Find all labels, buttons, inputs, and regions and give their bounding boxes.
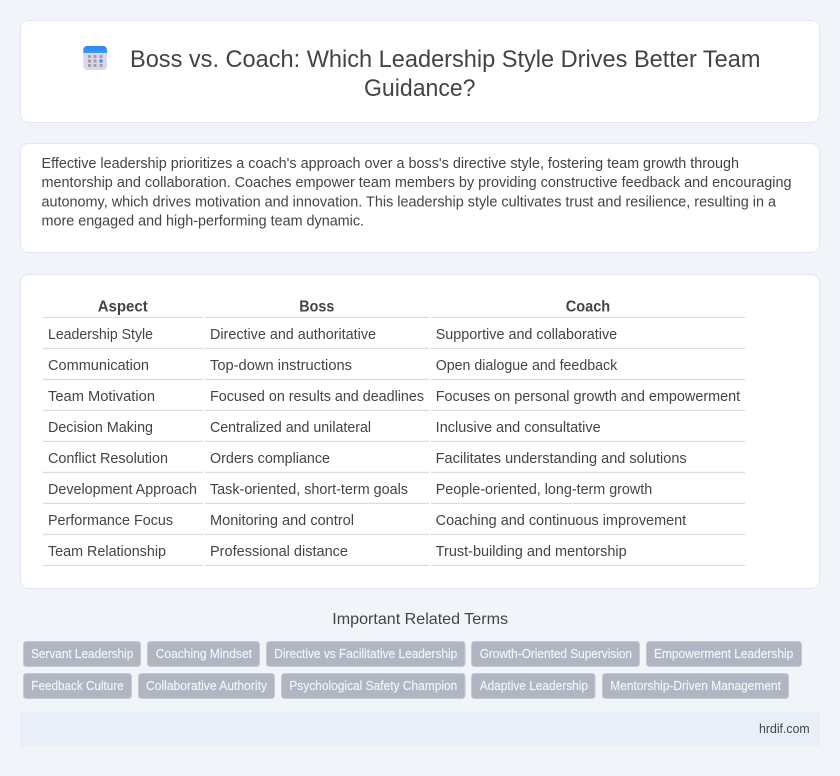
tag: Collaborative Authority [138,674,274,698]
table row: Decision Making [43,420,745,442]
table row: Team Relationship: Trust-building and mentorship [436,544,627,560]
table row: Development Approach: Task-oriented, short-term goals [210,482,408,498]
table row: Development Approach: People-oriented, long-term growth [436,482,652,498]
tag: Empowerment Leadership: Empowerment Leadership [654,647,793,661]
table row: Team Relationship: Team Relationship [48,544,166,560]
table row: Performance Focus: Performance Focus [48,513,173,529]
tag: Collaborative Authority: Collaborative Authority [146,679,268,693]
tag: Feedback Culture: Feedback Culture [31,679,124,693]
table header row: Coach [566,298,610,316]
panel: title card [20,20,820,122]
table row: Decision Making: Centralized and unilateral [210,420,371,436]
title [130,46,760,102]
table row: Performance Focus: Monitoring and control [210,513,354,529]
table row: Leadership Style [43,327,745,349]
footer [20,712,820,746]
tag: Directive vs Facilitative Leadership [266,642,465,666]
table row: Decision Making: Decision Making [48,420,153,436]
table row: Conflict Resolution: Orders compliance [210,451,330,467]
tag: Empowerment Leadership [646,642,802,666]
table row: Communication: Communication [48,358,149,374]
heading: important related terms: Important Related Terms [332,611,508,628]
text block: introduction paragraph: mentorship and collaboration. Coaches empower team members by providing constructive feedback and encouraging [42,175,792,191]
tag: Coaching Mindset: Coaching Mindset [156,647,252,661]
icon: calendar [83,46,107,70]
text block: introduction paragraph: more engaged and high-performing team dynamic. [42,214,364,230]
table row: Conflict Resolution: Facilitates understanding and solutions [436,451,687,467]
table row: Conflict Resolution [43,451,745,473]
table row: Team Relationship [43,544,745,566]
table row: Team Motivation: Focused on results and deadlines [210,389,424,405]
table row: Team Motivation: Team Motivation [48,389,155,405]
table row: Communication: Open dialogue and feedback [436,358,618,374]
text block: introduction paragraph: autonomy, which drives motivation and innovation. This leadership style cultivates trust and resilience, resulting in a [42,194,776,210]
table row: Communication [43,358,745,380]
table row: Leadership Style: Leadership Style [48,327,153,343]
table header row [43,298,745,318]
table row: Communication: Top-down instructions [210,358,352,374]
table row: Performance Focus [43,513,745,535]
tag: Adaptive Leadership [472,674,595,698]
footer: hrdif.com [759,721,810,736]
table row: Team Relationship: Professional distance [210,544,348,560]
table row: Leadership Style: Directive and authoritative [210,327,376,343]
panel: introduction [20,144,820,252]
table row: Leadership Style: Supportive and collaborative [436,327,617,343]
text block: introduction paragraph [42,156,792,230]
related terms tags [24,642,802,698]
tag: Mentorship-Driven Management: Mentorship-Driven Management [610,679,781,693]
tag: Growth-Oriented Supervision: Growth-Oriented Supervision [480,647,632,661]
tag: Mentorship-Driven Management [602,674,788,698]
tag: Servant Leadership: Servant Leadership [31,647,133,661]
title: Guidance? [364,75,476,102]
tag: Directive vs Facilitative Leadership: Directive vs Facilitative Leadership [274,647,457,661]
tag: Feedback Culture [24,674,132,698]
table row: Conflict Resolution: Conflict Resolution [48,451,168,467]
title: Boss vs. Coach: Which Leadership Style Drives Better Team [130,46,760,73]
text block: introduction paragraph: Effective leadership prioritizes a coach's approach over a boss's directive style, fostering team growth through [42,156,739,172]
table header row: Boss [299,298,334,316]
tag: Servant Leadership [24,642,140,666]
panel: comparison table [20,274,820,588]
table row: Team Motivation [43,389,745,411]
table row: Development Approach: Development Approach [48,482,197,498]
table header row: Aspect [98,298,148,316]
tag: Coaching Mindset [148,642,260,666]
tag: Growth-Oriented Supervision [472,642,640,666]
table row: Performance Focus: Coaching and continuous improvement [436,513,686,529]
tag: Psychological Safety Champion: Psychological Safety Champion [289,679,457,693]
table row: Team Motivation: Focuses on personal growth and empowerment [436,389,740,405]
tag: Psychological Safety Champion [282,674,465,698]
table row: Decision Making: Inclusive and consultative [436,420,601,436]
table row: Development Approach [43,482,745,504]
tag: Adaptive Leadership: Adaptive Leadership [480,679,588,693]
